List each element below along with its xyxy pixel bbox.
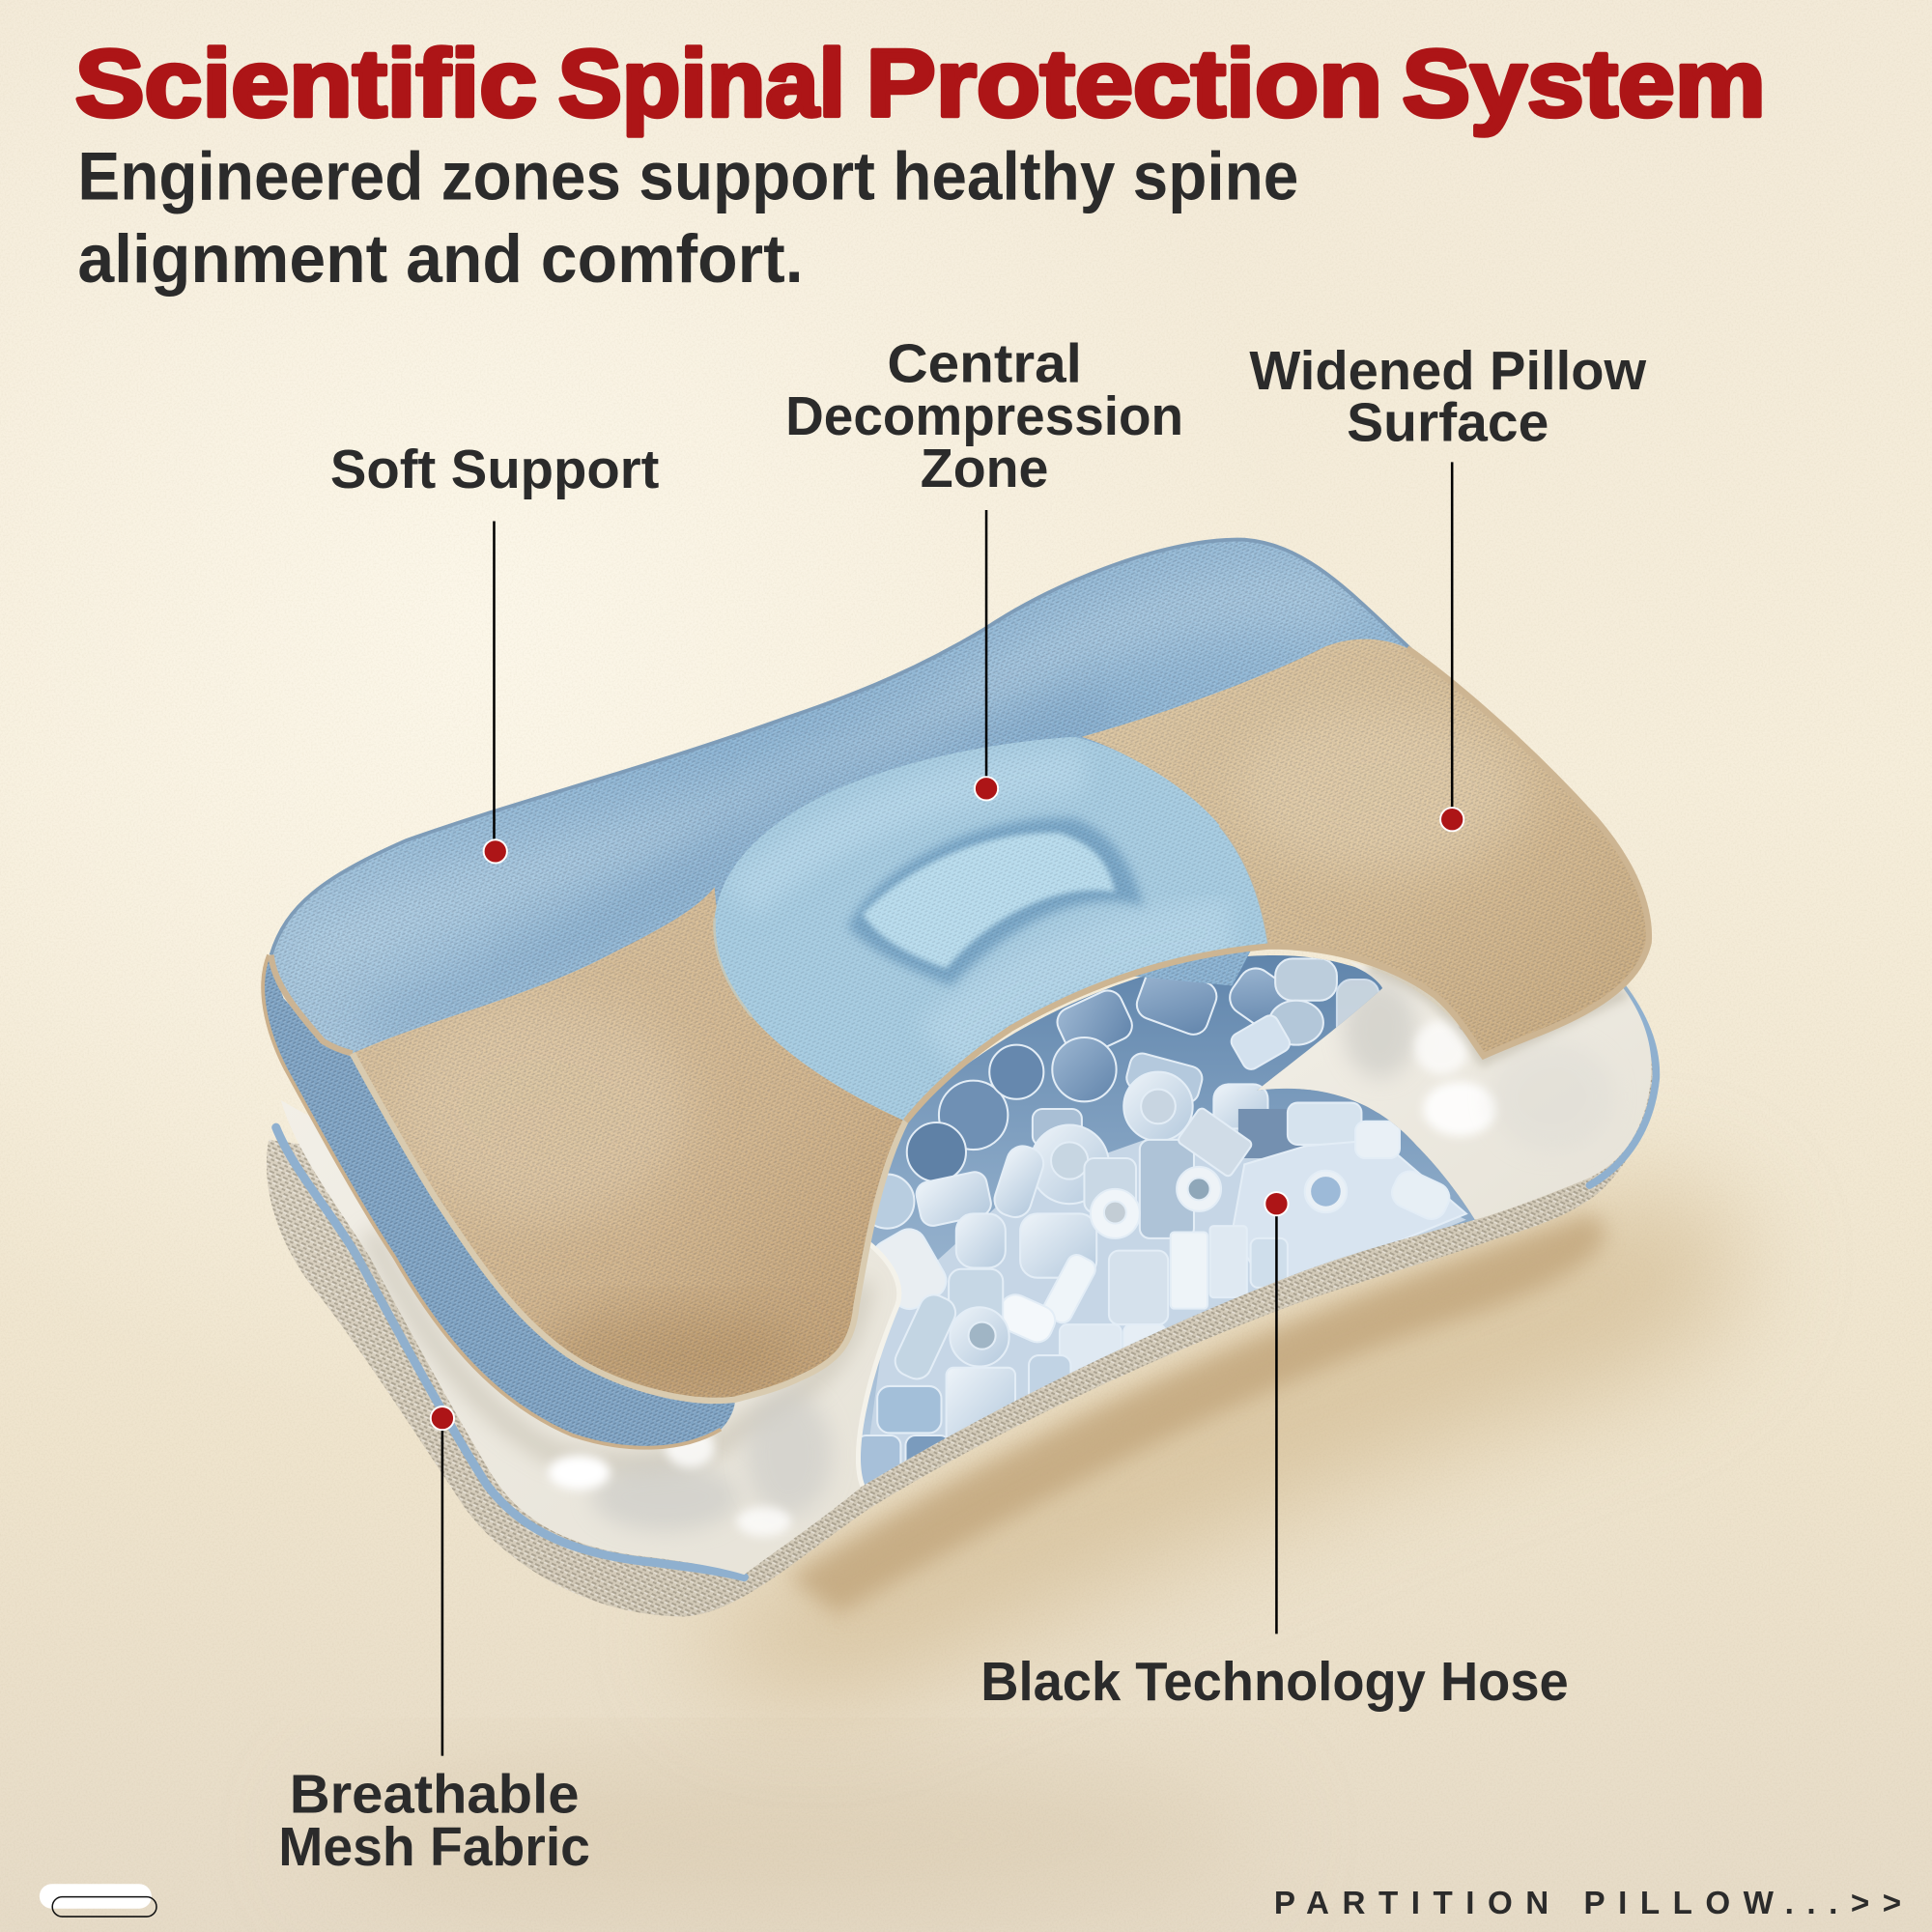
callout: central decompression zone — [785, 332, 1183, 800]
layer: white foam — [281, 961, 1652, 1575]
subtitle — [77, 138, 1298, 297]
cover: center decompression zone — [702, 727, 1282, 1133]
title — [75, 30, 1766, 136]
callout: black technology hose: Black Technology Hose — [980, 1651, 1569, 1712]
cover: tan right widened surface — [1072, 629, 1663, 1072]
layer: blue piping — [276, 985, 1656, 1577]
callout: breathable mesh fabric: Breathable — [290, 1763, 579, 1824]
cover: blue top outline — [271, 540, 1410, 1054]
callout: central decompression zone: Central — [887, 332, 1082, 393]
callout: central decompression zone: Zone — [921, 438, 1048, 498]
cover: tan left — [353, 887, 902, 1398]
title: System — [1403, 30, 1766, 136]
callout: central decompression zone: Decompression — [785, 385, 1183, 446]
title: Protection — [867, 30, 1382, 136]
corner pill icon — [40, 1884, 156, 1917]
subtitle: alignment and comfort. — [77, 220, 804, 297]
callout: soft support: Soft Support — [330, 439, 659, 499]
callout: widened pillow surface: Widened Pillow — [1249, 340, 1646, 401]
cover: tan left outline — [353, 1054, 906, 1401]
title: Spinal — [558, 30, 845, 136]
layer: breathable mesh base — [267, 1025, 1652, 1617]
callout: breathable mesh fabric — [278, 1406, 590, 1877]
callout: widened pillow surface: Surface — [1347, 392, 1548, 453]
title: Scientific — [75, 30, 537, 136]
callout: widened pillow surface — [1249, 340, 1646, 831]
pillow drop shadow — [690, 1182, 1742, 1691]
subtitle: Engineered zones support healthy spine — [77, 138, 1298, 214]
callout: black technology hose — [980, 1192, 1569, 1712]
callout: soft support — [330, 439, 659, 863]
cover: tan right outline — [906, 648, 1649, 1122]
cover: blue top soft support — [272, 541, 1406, 1053]
layer: gel hose filling — [850, 949, 1491, 1503]
cover: center outline — [715, 826, 1269, 1016]
cover: blue side band — [263, 955, 735, 1448]
callout: breathable mesh fabric: Mesh Fabric — [278, 1816, 590, 1877]
footer tag: PARTITION PILLOW...>> — [1274, 1886, 1901, 1921]
layer: gel seam — [859, 1238, 899, 1486]
pillow illustration — [246, 518, 1676, 1627]
